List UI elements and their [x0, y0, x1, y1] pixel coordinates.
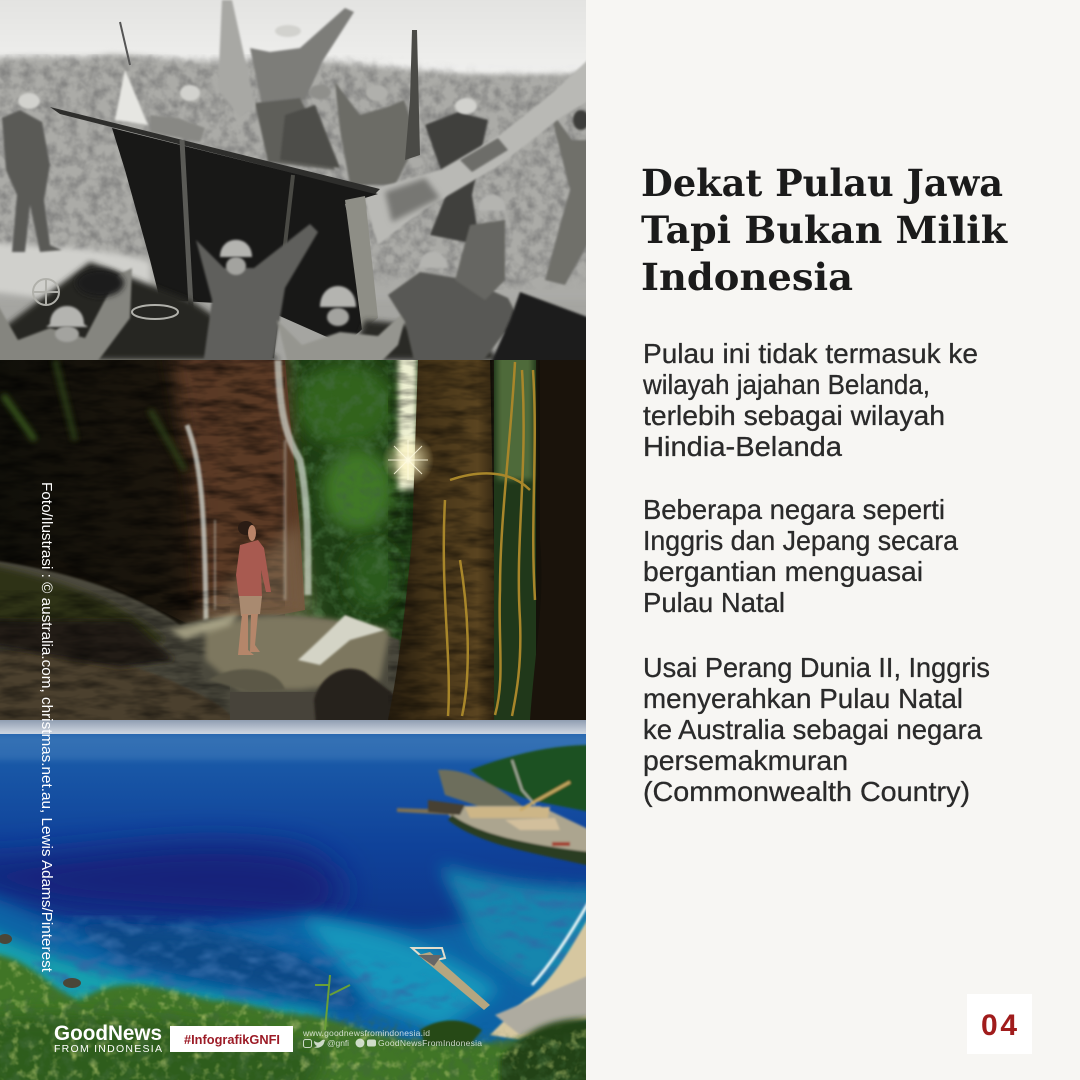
text block: handover to Australia: ke Australia sebagai negara: [643, 714, 983, 745]
text block: colonial status: Pulau ini tidak termasuk ke: [643, 338, 978, 369]
helmets back row: [18, 25, 589, 130]
title: Indonesia: [641, 255, 853, 299]
standing soldiers back row: [2, 8, 590, 285]
island town and port on the right: [397, 745, 590, 866]
text block: colonial status: wilayah jajahan Belanda,: [642, 369, 930, 400]
text block: handover to Australia: Usai Perang Dunia II, Inggris: [643, 652, 990, 683]
foreground foliage: [0, 950, 526, 1080]
deep navy water: [0, 843, 342, 925]
text block: handover to Australia: menyerahkan Pulau Natal: [643, 683, 963, 714]
sky strip: [0, 720, 586, 734]
photo: aerial view of Christmas Island bay: [0, 720, 620, 1080]
text block: handover to Australia: (Commonwealth Country): [643, 776, 970, 807]
text block: handover to Australia: [643, 652, 990, 807]
road and shore: [495, 975, 590, 1035]
text block: colonial status: Hindia-Belanda: [643, 431, 843, 462]
helmets front row: [46, 194, 506, 327]
text block: Britain and Japan: Pulau Natal: [643, 587, 785, 618]
vines and forest behind: [494, 360, 536, 720]
photo credit, vertical: Foto/Ilustrasi : © australia.com, christmas.net.au, Lewis Adams/Pinterest: [38, 482, 54, 972]
beach: [490, 915, 590, 1040]
shadowed ground under the front row: [0, 262, 280, 360]
man standing: [236, 521, 271, 655]
text block: colonial status: terlebih sebagai wilayah: [643, 400, 945, 431]
huge tree trunk: [388, 360, 500, 720]
text block: Britain and Japan: Beberapa negara seperti: [643, 494, 945, 525]
footer: website and social handles: GoodNewsFromIndonesia: [378, 1038, 482, 1048]
front soldiers: [0, 220, 532, 365]
boulder: [313, 667, 393, 720]
photo: soldiers with flags on a gun shield (black and white): [0, 0, 616, 365]
title: Tapi Bukan Milik: [641, 208, 1008, 252]
jetty pier: [412, 948, 490, 1010]
icon: instagram: [304, 1040, 312, 1048]
gun wheels: [33, 279, 178, 319]
footer: hashtag badge: #InfografikGNFI: [184, 1033, 280, 1047]
footer: GoodNews From Indonesia logo: FROM INDONESIA: [54, 1043, 162, 1055]
footer: website and social handles: @gnfi: [327, 1038, 349, 1048]
icon: youtube: [367, 1040, 376, 1046]
faces front row: [55, 257, 349, 342]
text block: Britain and Japan: Inggris dan Jepang secara: [643, 525, 959, 556]
rock walls: [168, 360, 305, 623]
footer: hashtag badge: [170, 1026, 293, 1052]
title: Dekat Pulau Jawa: [641, 161, 1003, 205]
footer: website and social handles: [302, 1028, 482, 1048]
icon: facebook: [356, 1038, 364, 1048]
footer: website and social handles: www.goodnewsfromindonesia.id: [302, 1028, 430, 1038]
title: [641, 161, 1008, 299]
footer: GoodNews From Indonesia logo: [54, 1022, 162, 1055]
page number badge: 04: [981, 1009, 1017, 1042]
text block: Britain and Japan: [643, 494, 959, 618]
forest foliage: [285, 360, 425, 650]
page number badge: [967, 994, 1032, 1054]
waterfall streaks: [187, 360, 308, 625]
dark metal shield: [112, 128, 378, 345]
photo: man under a waterfall in the forest: [0, 340, 586, 740]
sun flare: [383, 436, 433, 484]
icon: twitter: [314, 1040, 325, 1048]
text block: handover to Australia: persemakmuran: [643, 745, 848, 776]
cave floor and rocks: [0, 560, 400, 730]
small rocks: [0, 934, 12, 944]
footer: GoodNews From Indonesia logo: GoodNews: [54, 1022, 162, 1045]
shallow reef: [0, 892, 552, 1044]
raised flags: [218, 0, 255, 118]
text block: Britain and Japan: bergantian menguasai: [643, 556, 923, 587]
dark right trunk: [530, 656, 536, 720]
text block: colonial status: [642, 338, 978, 462]
